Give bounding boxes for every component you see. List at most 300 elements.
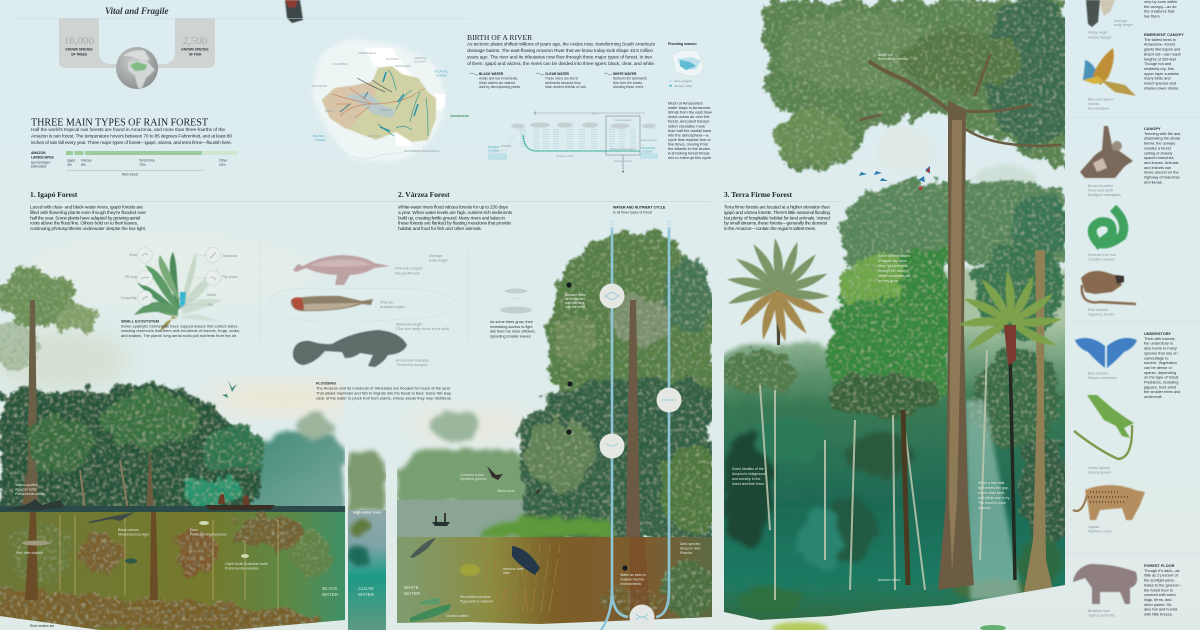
label: clear water: WATER [358, 592, 375, 597]
label: average body length: Average [429, 254, 442, 258]
circles [600, 284, 624, 308]
divider lines [260, 240, 468, 340]
intro text: Half the world's tropical rain forests are found in Amazonia, and more than three-fourths of the [31, 127, 225, 133]
label: iguana: Green iguana [1088, 466, 1110, 470]
label: jaguar: Panthera onca [1088, 530, 1111, 534]
diagram: water cycle: Evaporation [641, 138, 657, 142]
text: Igapó Forest: half the year. Some plants have adapted by growing aerial [30, 215, 140, 221]
sidebar text: canopy: spaced branches [1144, 155, 1174, 160]
label: sloth: Brown-throated [1088, 184, 1113, 188]
sidebar text: understory: can be dense or [1144, 365, 1173, 370]
label: harpy eagle: Harpia harpyja [1088, 36, 1111, 40]
text: moisture recycling: into the atmosphere—a [668, 132, 709, 137]
map: Amazon basin: SOUTHERN AMAZONIAN [404, 149, 439, 153]
text: moisture recycling: Winds from the east blow [668, 110, 712, 115]
scene: várzea forest [397, 232, 720, 630]
text: small ecosystem: SMALL ECOSYSTEM [121, 320, 159, 324]
sidebar text: understory: sparse, depending [1144, 370, 1176, 375]
white water: flow from the Andes, [613, 81, 643, 85]
forest labels: Bertholletia excelsa [878, 57, 908, 61]
label: macaw: macaw [1088, 102, 1100, 106]
sidebar: strata animals [1066, 0, 1200, 618]
text: moisture recycling: than half the rainfall back [668, 128, 711, 133]
sidebar text: understory: the understory is [1144, 341, 1173, 346]
label: average body length: body length [429, 258, 448, 262]
map: Amazon basin: GUIANA [414, 60, 426, 64]
text: moisture recycling: water stays in Amazonia. [668, 105, 711, 110]
second tier tree [840, 181, 1070, 262]
submerged trunks [25, 512, 158, 600]
map: Amazon basin: PERU [325, 109, 333, 113]
bar: varzea [74, 151, 84, 155]
forest labels: which other trees [978, 491, 1005, 495]
icon: bromeliad ecosystem: Snail [129, 253, 137, 257]
text: moisture recycling: the Atlantic to the Andes. [668, 146, 711, 151]
text: leaves note: As some trees grow, their [490, 320, 534, 324]
sidebar text: forest floor: the sunlight pene- [1144, 578, 1176, 583]
sidebar text: forest floor: lings, ferns, and [1144, 597, 1171, 602]
cycle: water pipes [565, 220, 682, 630]
underwater labels: Yellow-spotted [15, 483, 38, 487]
forest floor glow [772, 622, 828, 630]
label: maximum length: Maximum length [396, 322, 422, 326]
map: Amazon basin: OCEAN [315, 138, 326, 142]
bright jungle canopy [722, 240, 1069, 550]
palm trunk right [1010, 350, 1015, 580]
sidebar text: understory: camouflage to [1144, 355, 1168, 360]
label: sloth: three-toed sloth [1088, 188, 1113, 192]
intro text: inches of rain fall every year. Three major types of forest—igapó, várzea, and terra firme—flourish here. [31, 140, 232, 146]
forest labels: Brazil nut [878, 53, 893, 57]
sidebar text: understory: Predators, including [1144, 380, 1178, 384]
text: small ecosystem: and snakes. The plants' long aerial roots pull nutrients from the air [121, 334, 237, 338]
sidebar text: understory: survive. Vegetation [1144, 360, 1177, 365]
label: arapaima: Arapaima gigas [379, 305, 405, 309]
text: moisture recycling: ens to interrupt this cycle. [668, 155, 712, 160]
icon: bromeliad ecosystem: Soil [207, 303, 213, 307]
clear water: These rivers are low in [545, 77, 578, 81]
distant bird [222, 380, 237, 398]
diagram: water cycle: Condensation [614, 118, 633, 122]
text: small ecosystem: Some epiphytic bromeliads have cupped leaves that collect water, [121, 324, 238, 328]
chart: Amazon landscapes: Várzea [81, 158, 91, 162]
sidebar text: understory: on the type of forest. [1144, 375, 1179, 380]
label: tapir: Brazilian tapir [1088, 609, 1110, 613]
subheading: water and nutrient cycle: in all three types of forest [613, 210, 652, 214]
number: fish: 2,500 [183, 35, 208, 47]
cycle: water pipes: and falls back [565, 301, 585, 305]
sidebar text: emergent canopy: insect species and [1144, 80, 1176, 86]
underwater labels: Pacu [190, 528, 198, 532]
label: boa: Emerald tree boa [1088, 253, 1116, 257]
label: tamarin: Saguinus bicolor [1088, 313, 1115, 317]
forest labels: in shade rely upon [878, 259, 907, 263]
diagram: water cycle: OCEAN [642, 150, 653, 154]
text: Igapó Forest: Laced with clear- and black-water rivers, igapó forests are [30, 204, 143, 210]
label: macaw: Ara ararauna [1087, 107, 1109, 111]
forest labels: When a tree falls, [978, 481, 1005, 485]
sidebar text: forest floor: with little breeze. [1144, 612, 1173, 616]
text: moisture recycling: five times, moving from [668, 141, 708, 146]
scene: várzea forest: Dark species [680, 542, 700, 546]
label: morpho: Morpho menelaus [1088, 376, 1117, 380]
sidebar text: canopy: below, the canopy [1144, 141, 1175, 146]
label: body length: body length [1114, 23, 1133, 27]
caption: trees: OF TREES [71, 52, 87, 56]
underwater labels: Melanosuchus niger [118, 532, 150, 536]
flooding season inset: June–August [674, 79, 692, 83]
text: Várzea Forest: build up, creating fertile ground. Many rivers and lakes in [398, 215, 505, 221]
underwater labels: Podocnemis expansa [225, 566, 259, 570]
birds [487, 466, 541, 495]
misty forest [397, 406, 528, 500]
white water: clouding these rivers [613, 85, 644, 89]
heading: Terra Firme Forest: 3. Terra Firme Forest [724, 190, 793, 199]
slim trunks [760, 350, 987, 600]
diagram: water cycle [488, 111, 658, 173]
cycle: water pipes: onto the forest [565, 305, 585, 309]
number markers [566, 282, 572, 288]
animal: pink river dolphin [293, 255, 390, 285]
sidebar text: canopy intro: live there. [1144, 14, 1161, 19]
label: white water: WATER [404, 591, 421, 596]
palm left [726, 238, 830, 345]
right tall trunk [1024, 250, 1053, 592]
chart: Amazon landscapes [31, 151, 237, 176]
label: river dolphin: Pink river dolphin [395, 266, 423, 270]
trunk left [27, 300, 38, 510]
black water: BLACK WATER [479, 72, 504, 76]
scene: várzea forest: Corded catfish [446, 614, 469, 618]
heading: three main types of rain forest: THREE MAIN TYPES OF RAIN FOREST [31, 118, 209, 128]
forest labels: The result is more [978, 501, 1006, 505]
forest labels: Some of their leaves [878, 254, 910, 258]
forest floor green mark [980, 625, 1006, 630]
circle 3 [600, 434, 624, 458]
icon: leaves [500, 288, 532, 314]
jungle base [724, 265, 1065, 620]
heading: birth of a river: BIRTH OF A RIVER [467, 33, 533, 42]
diagram: water cycle: Evapotranspiration [610, 147, 636, 151]
sidebar text: canopy: and lianas. [1144, 179, 1163, 184]
map: Amazon basin: SURINAME [395, 64, 411, 68]
sidebar text: forest floor: covered with seed- [1144, 592, 1177, 597]
label: macaw: Blue-and-yellow [1088, 98, 1114, 102]
map: Amazon basin: PACIFIC [313, 134, 325, 138]
sidebar text: understory: UNDERSTORY [1144, 331, 1171, 336]
sidebar text: forest floor: the forest floor is [1144, 587, 1173, 592]
icon: bromeliad ecosystem: Tarantula [222, 254, 237, 258]
light shaft [965, 400, 1022, 600]
sidebar text: canopy: and leaves. Animals [1144, 160, 1179, 165]
underwater labels: Piaractus brachypomus [190, 532, 227, 536]
sidebar text: canopy: ceiling of closely [1144, 150, 1172, 155]
map: Amazon basin: BOLIVIA [368, 134, 380, 138]
lake surface [397, 500, 537, 537]
chart: Amazon landscapes: 4% [67, 163, 72, 167]
river text: As tectonic plates shifted millions of years ago, the Andes rose, transforming South America's [467, 42, 656, 48]
animal: sloth [1080, 126, 1133, 178]
bar: other [203, 151, 237, 155]
forest labels: forest and their trees [732, 482, 764, 486]
bar: terra firme [85, 151, 202, 155]
forest labels: and worship in the [732, 477, 760, 481]
caption: fish: OF FISH [189, 52, 202, 56]
label: maximum length: (The size rarely found in the wild) [396, 327, 449, 331]
forest labels: and plants use to try [978, 496, 1010, 500]
caiman and fish [22, 512, 249, 564]
forest labels: Amazon rivers [878, 578, 901, 582]
label: white water: WHITE [404, 585, 419, 590]
canoe with people [205, 494, 275, 510]
text: Terra Firme Forest: but plenty of hospitable habitat for land animals. Veined [724, 215, 830, 221]
bar: igapo [66, 151, 73, 155]
scene: várzea forest: Common potoo [460, 473, 484, 477]
sidebar text: forest floor: other plants. It's [1144, 602, 1171, 607]
scene: várzea forest: shallow riverine [620, 578, 644, 582]
chart: Amazon landscapes: (percentages [31, 160, 50, 164]
sidebar text: emergent canopy: upper layer sustains [1144, 71, 1179, 76]
forest labels: light enters the gap, [978, 486, 1009, 490]
sidebar text: emergent canopy: The tallest trees in [1144, 37, 1176, 42]
heading: Vital and Fragile: Vital and Fragile [105, 6, 169, 16]
sidebar text: understory: species that rely on [1144, 350, 1178, 355]
scene: várzea forest: Piranha [680, 551, 692, 555]
cycle: water pipes: air condenses [565, 297, 585, 301]
sidebar text: understory: jaguars, hunt amid [1143, 384, 1176, 389]
flooding season inset [668, 42, 704, 88]
text: Igapó Forest: filled with flowering plants even though they're flooded over [30, 210, 146, 216]
river text: drainage basins. The east-flowing Amazon River that we know today took shape 10.5 million [467, 48, 653, 54]
icon: bromeliad ecosystem [121, 248, 238, 332]
lower understory [724, 418, 1062, 614]
heading: Várzea Forest: 2. Várzea Forest [398, 190, 450, 199]
text: Terra Firme Forest: igapó and várzea forests. There's little seasonal flooding [724, 210, 830, 216]
text: Terra Firme Forest: Terra firme forests are located at a higher elevation than [724, 204, 830, 210]
caption: fish: KNOWN SPECIES [181, 48, 209, 52]
chart: Amazon landscapes: LANDSCAPES [31, 155, 55, 159]
forest labels: through the canopy [878, 269, 908, 273]
turtles on log [5, 499, 65, 510]
crown tree left [0, 270, 95, 367]
black water: Acidic and low in nutrients, [479, 77, 518, 81]
label: high water level: High-water level [353, 510, 381, 514]
clear water: CLEAR WATER [545, 72, 570, 76]
heading: water and nutrient cycle: WATER AND NUTRIENT CYCLE [613, 206, 666, 210]
flooding season inset: Flooding season [668, 42, 697, 46]
label: arapaima: Pirarucu [380, 300, 393, 304]
icon: bromeliad ecosystem: Water [207, 293, 217, 297]
animal: arapaima [270, 288, 458, 322]
trunk underwater [630, 537, 649, 613]
forest labels: Amazon's indigenous [732, 472, 765, 476]
submerged plants [0, 516, 328, 630]
black water: these waters are stained [479, 81, 515, 85]
scene: várzea forest: Amazon river [503, 567, 524, 571]
label: manatee: Amazonian manatee [396, 358, 429, 362]
misty distance forest [250, 427, 345, 506]
scene: várzea forest: environments [620, 582, 641, 586]
map: Amazon basin: VENEZUELA [358, 51, 376, 55]
white water: Nutrient-rich sediments [613, 77, 647, 81]
sidebar text: canopy: shadowing the strata [1144, 136, 1181, 141]
sidebar text: emergent canopy: many birds and [1144, 76, 1171, 81]
underwater labels: Black caiman [118, 528, 139, 532]
text: moisture recycling: forest, and plant transpi- [668, 119, 711, 124]
sidebar text: canopy: and insects can [1144, 165, 1171, 170]
intro text: Amazon is rain forest. The temperature hovers between 70 to 85 degrees Fahrenheit, and at least 80 [31, 134, 232, 140]
sidebar text: understory: also home to many [1144, 346, 1177, 351]
meadow [480, 517, 612, 537]
reeds [484, 545, 560, 612]
chart: Amazon landscapes: estimated) [31, 164, 46, 168]
sidebar text: forest floor: little as 2 percent of [1144, 573, 1179, 578]
text: Várzea Forest: habitat and food for fish and other animals. [398, 226, 482, 232]
forest labels: diversity [978, 506, 991, 510]
water surface [0, 506, 345, 512]
species counts panel [15, 18, 470, 68]
animal: manatee [293, 330, 407, 367]
label: morpho: Blue morpho [1088, 372, 1108, 376]
animal: pied tamarin [1081, 271, 1136, 304]
underwater labels: Amazon turtle [15, 488, 37, 492]
fish and animals [410, 538, 540, 622]
clear water: sediments because they [545, 81, 581, 85]
rivers [332, 70, 428, 136]
text: leaves note: increasing access to light [490, 325, 533, 329]
forest labels: as they grow [878, 279, 898, 283]
label: tamarin: Pied tamarin [1088, 308, 1108, 312]
sidebar text: emergent canopy: Though hot and [1144, 61, 1171, 66]
black water: dark by decomposing plants [479, 85, 520, 89]
text: flooding: FLOODING [316, 382, 336, 386]
icon: bromeliad ecosystem: Pill bug [125, 275, 137, 279]
sidebar text: understory: undercroft. [1144, 394, 1163, 399]
section rule [30, 201, 838, 203]
note: river wolves: River wolves are [30, 624, 55, 628]
text: leaves note: lets them be more efficient, [490, 330, 536, 334]
scene: várzea forest: Red-bellied piranha [460, 595, 490, 599]
map: Amazon basin: BRAZIL [381, 108, 392, 112]
main tree crown [762, 0, 1078, 175]
white water: WHITE WATER [613, 72, 637, 76]
sidebar text: emergent canopy: heights of 200 feet. [1144, 56, 1177, 61]
chart: Amazon landscapes: Other [219, 158, 227, 162]
sidebar text: forest floor: also hot and humid, [1144, 607, 1178, 612]
diagram: water cycle: OCEAN [488, 148, 499, 152]
sidebar text: canopy: Teeming with life and [1144, 131, 1180, 136]
sidebar text: understory: Thick with insects, [1144, 336, 1176, 341]
text: flooding: The Amazon and its hundreds of tributaries are flooded for much of the year. [316, 386, 451, 390]
circle 2 [656, 388, 682, 412]
scene: várzea forest: Amazon river [680, 546, 701, 550]
palm right [958, 270, 1062, 366]
text: Igapó Forest: roots above the flood line. Others hold on to their leaves, [30, 221, 138, 227]
text: leaves note: sprouting smaller leaves [490, 334, 531, 338]
diagram: water cycle: Stream inflow [556, 154, 575, 158]
animal: harpy eagle [1086, 0, 1115, 27]
map: Amazon basin: OCEAN [436, 73, 447, 77]
animal: macaw [1083, 48, 1136, 96]
number: trees: 16,000 [64, 35, 95, 47]
text: moisture recycling: cycle that repeats four or [668, 137, 712, 142]
label: sloth: Bradypus variegatus [1088, 193, 1121, 197]
flooding season inset: January–May [674, 84, 693, 88]
text: Igapó Forest: continuing photosynthesis underwater despite the low light. [30, 226, 146, 232]
diagram: water cycle: ATLANTIC [641, 146, 655, 150]
sidebar text: canopy: move around on the [1144, 170, 1179, 175]
chart: Amazon landscapes: AMAZON [31, 151, 45, 155]
animal: jaguar [1073, 485, 1145, 520]
scene: várzea forest: Water as seen in [620, 573, 646, 577]
sidebar text: canopy intro: the creatures that [1144, 9, 1175, 14]
map: Amazon basin [312, 39, 449, 162]
text: Várzea Forest: a year. When water levels are high, nutrient-rich sediments [398, 210, 513, 216]
label: clear water: CLEAR [358, 586, 374, 591]
scarlet macaws [859, 166, 930, 191]
map: Amazon basin: GUYANA [386, 57, 398, 61]
label: boa: Corallus caninus [1088, 258, 1115, 262]
sidebar text: canopy: creates a forest [1144, 145, 1172, 150]
diagram: water cycle: ANDES [501, 144, 511, 148]
forest labels: Scarlet macaw [872, 162, 895, 166]
text: small ecosystem: creating reservoirs that teem with hundreds of insects, frogs, crabs, [121, 329, 240, 333]
sidebar text: emergent canopy: shades lower strata. [1144, 85, 1179, 90]
river text: of them, igapó and várzea, the rivers can be divided into three types: black, clear, and white. [467, 61, 655, 67]
chart: Amazon landscapes: 8% [81, 163, 86, 167]
animal: tapir [1073, 564, 1137, 604]
sidebar text: forest floor: trates to the ground— [1144, 582, 1182, 587]
scene: igapó forest [0, 264, 345, 630]
under-canopy forest [520, 378, 720, 540]
scene: várzea forest: Pygocentrus nattereri [460, 600, 493, 604]
chart: Amazon landscapes: Terra firme [139, 158, 155, 162]
label: jaguar: Jaguar [1088, 525, 1099, 529]
main trunk [938, 100, 974, 590]
scene: várzea forest: otter [503, 571, 511, 575]
label: body length: Average [1114, 19, 1127, 23]
label: harpy eagle: Harpy eagle [1088, 30, 1107, 34]
forest labels: Some families of the [732, 467, 764, 471]
sidebar text: emergent canopy: EMERGENT CANOPY [1144, 32, 1184, 37]
chart: Amazon landscapes: Igapó [67, 158, 75, 162]
sidebar text: emergent canopy: Brazil nut—can reach [1144, 51, 1181, 56]
label: manatee: Trichechus inunguis [396, 363, 428, 367]
caption: trees: KNOWN SPECIES [65, 48, 93, 52]
text: Várzea Forest: White-water rivers flood várzea forests for up to 230 days [398, 204, 509, 210]
chart: Amazon landscapes: Rain forest [122, 172, 138, 176]
label: tapir: Tapirus terrestris [1088, 614, 1115, 618]
text: moisture recycling: A shrinking forest threat- [668, 151, 711, 156]
animal: emerald tree boa [1092, 208, 1124, 246]
boat [432, 522, 450, 526]
sidebar text: emergent canopy: giants like kapok and [1144, 47, 1180, 52]
text: moisture recycling: Much of Amazonia's [668, 100, 703, 106]
dark forest mass [0, 386, 260, 515]
map: Amazon basin: ECUADOR [312, 84, 328, 88]
icon: bromeliad ecosystem: Dragonfly [121, 296, 137, 300]
animal: morpho butterfly [1075, 338, 1137, 368]
mid canopy [25, 392, 267, 506]
scene: várzea forest: Nyctibius griseus [460, 477, 487, 481]
label: iguana: Iguana iguana [1088, 471, 1111, 475]
underwater labels: Pink river dolphin [16, 551, 43, 555]
underwater labels: Giant South American turtle [225, 562, 268, 566]
cycle: water pipes: Moisture in the [565, 293, 586, 297]
underwater labels [15, 483, 268, 570]
map label: Amazonia: Amazonia [449, 113, 470, 118]
text: moisture recycling: ration circulates more [668, 123, 705, 128]
